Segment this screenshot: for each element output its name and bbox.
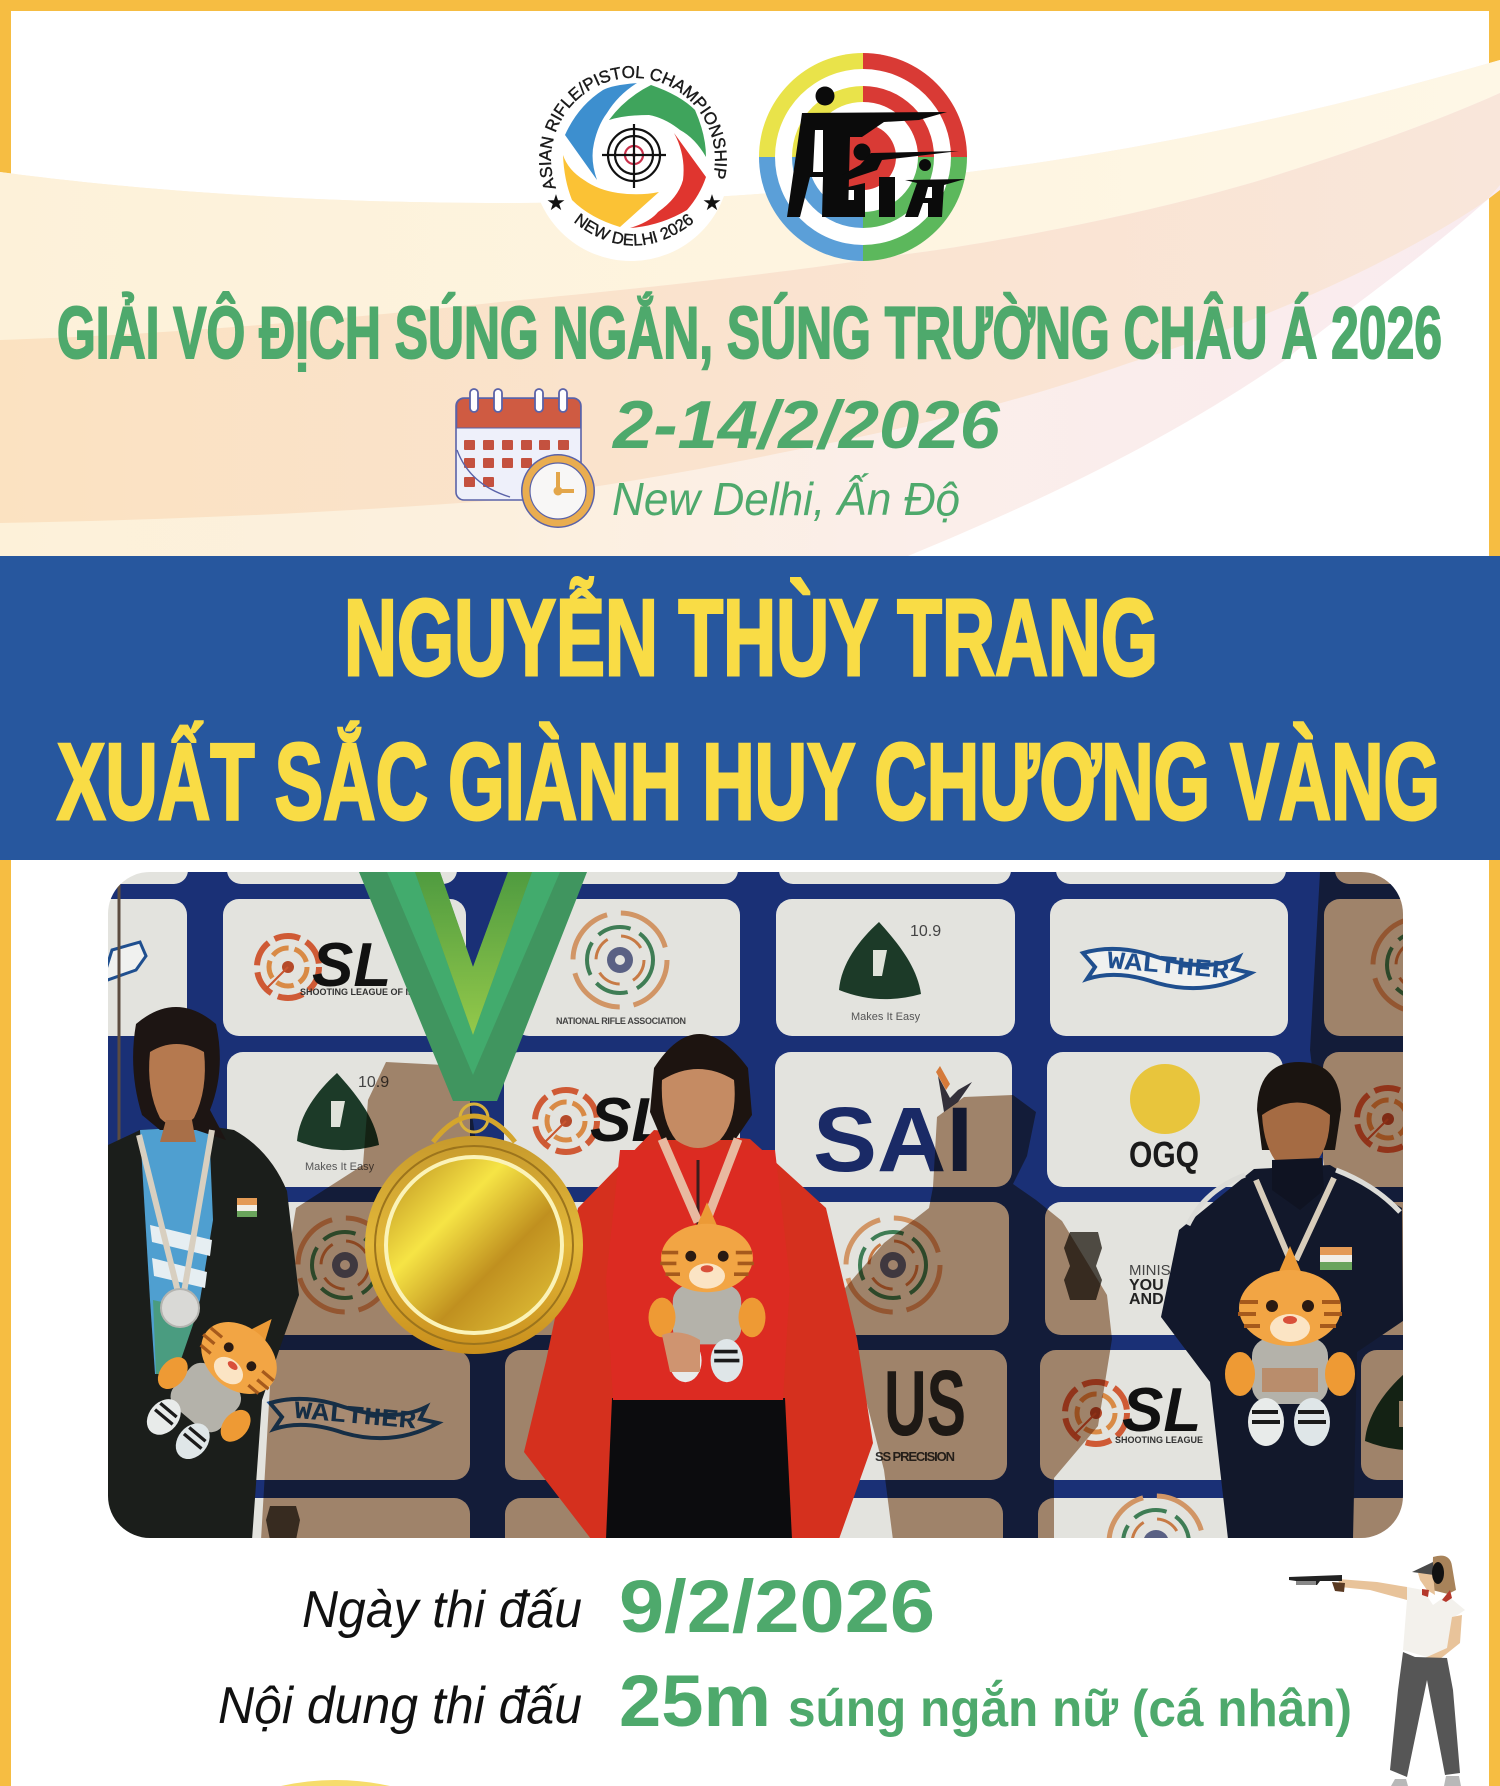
gold medal xyxy=(365,1104,583,1354)
sponsor logos xyxy=(102,913,1467,1590)
event location: New Delhi, Ấn Độ xyxy=(612,473,960,525)
sponsor logos: US xyxy=(884,1351,966,1455)
logo: Asian Rifle/Pistol Championship New Delhi 2026 xyxy=(539,66,727,261)
ring text bottom: NEW DELHI 2026 xyxy=(574,213,693,246)
swirl: yellow petal xyxy=(563,155,659,227)
emblem lettering silhouette xyxy=(787,86,965,217)
swirl: green petal xyxy=(609,85,706,157)
value: match date: 9/2/2026 xyxy=(619,1565,935,1648)
swirl: red petal xyxy=(630,133,706,228)
shadows on backdrop xyxy=(261,872,1403,1540)
icon: female pistol shooter xyxy=(1289,1556,1465,1786)
medal ribbon xyxy=(359,872,587,1101)
swirl: blue petal xyxy=(565,83,637,180)
sponsor logos: Makes It Easy xyxy=(851,1011,921,1023)
sponsor logos: Makes It Easy xyxy=(305,1161,375,1173)
sponsor logos: SHOOTING LEAGUE OF INDIA xyxy=(300,987,431,997)
decorative yellow seal top edge xyxy=(281,1780,390,1786)
sponsor logos: 10.9 xyxy=(358,1074,389,1091)
sponsor logos: MINIS xyxy=(1129,1262,1171,1279)
value: event name: súng ngắn nữ (cá nhân) xyxy=(788,1679,1352,1738)
value: 25m: 25m xyxy=(619,1661,771,1742)
center target xyxy=(602,124,666,188)
sponsor logos: AND xyxy=(1129,1291,1164,1308)
label: event: Nội dung thi đấu xyxy=(218,1677,582,1735)
backdrop pole xyxy=(118,884,120,1140)
sponsor logos: SHOOTING LEAGUE xyxy=(1115,1435,1203,1445)
sponsor logos: SL xyxy=(312,931,391,1000)
sponsor logos: SS PRECISION xyxy=(875,1449,955,1464)
headline banner xyxy=(0,556,1500,860)
logo: Asian Rifle/Pistol Championship New Delhi 2026: ★ xyxy=(702,191,722,216)
background waves xyxy=(0,60,1500,556)
sponsor logos: YOU xyxy=(1129,1277,1164,1294)
sponsor logos: SL xyxy=(590,1086,669,1155)
athlete: silver medalist xyxy=(108,1007,313,1540)
match date row xyxy=(302,1565,935,1648)
athlete: gold medalist Nguyễn Thùy Trang xyxy=(524,1034,873,1539)
event row xyxy=(218,1661,1352,1742)
label: match date: Ngày thi đấu xyxy=(302,1581,582,1639)
panel: podium photo xyxy=(108,872,1403,1538)
sponsor backdrop panels xyxy=(108,872,1403,1538)
event date: 2-14/2/2026 xyxy=(611,387,1001,463)
stars: ★ xyxy=(546,191,566,216)
ring text top: ASIAN RIFLE/PISTOL CHAMPIONSHIP xyxy=(539,66,727,188)
clock xyxy=(521,454,595,528)
athlete: bronze medalist xyxy=(1161,1062,1403,1539)
logo: ASIA shooting confederation target xyxy=(759,53,967,261)
icon: calendar with clock xyxy=(456,389,595,528)
sponsor logos: SAI xyxy=(813,1089,973,1191)
sponsor logos: 10.9 xyxy=(910,923,941,940)
sponsor logos: OGQ xyxy=(1129,1134,1199,1175)
sponsor logos: NATIONAL RIFLE ASSOCIATION xyxy=(556,1016,686,1026)
sponsor logos: SL xyxy=(1122,1376,1201,1445)
